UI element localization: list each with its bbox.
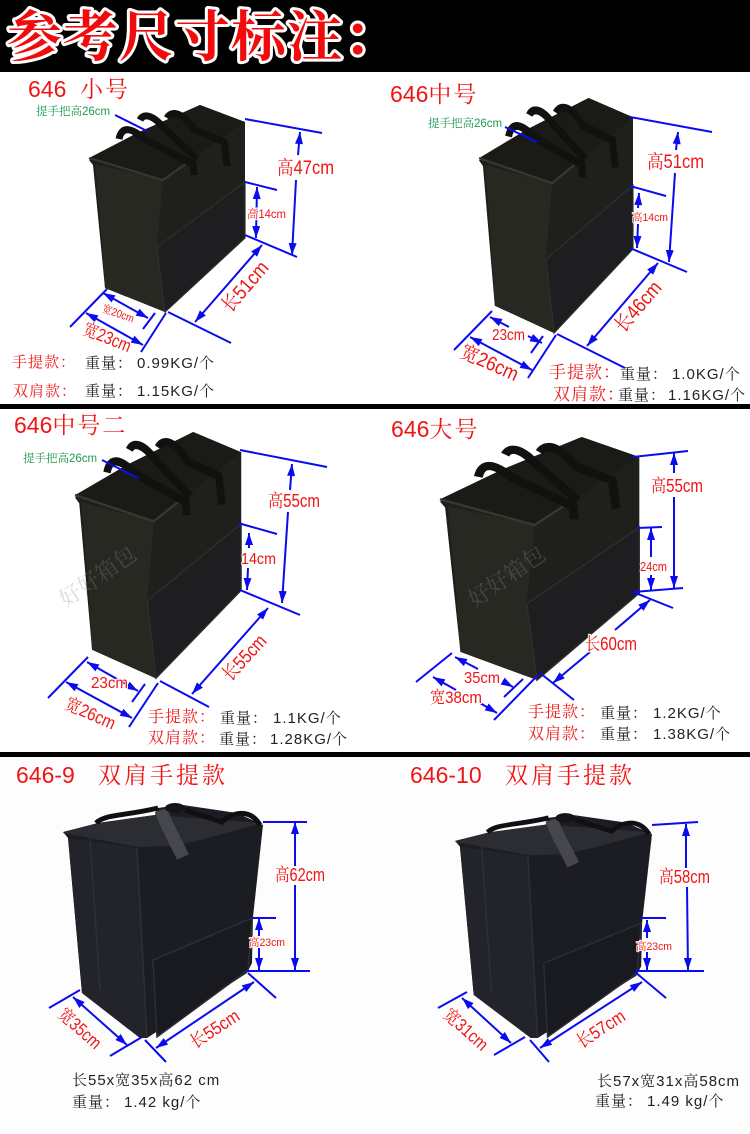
- weight: shoulder: 双肩款：: [148, 729, 216, 747]
- spec: dimensions: 长55x宽35x高62 cm: [72, 1071, 220, 1089]
- label: length 46: 长46cm: [610, 277, 666, 337]
- label: pocket height 23: 高23cm: [249, 935, 285, 949]
- heading: 646 small: 646: [28, 76, 66, 102]
- label: length 55: 长55cm: [186, 1006, 243, 1052]
- label: pocket height 23: 高23cm: [636, 939, 672, 953]
- label: inner width 35: 35cm: [464, 670, 500, 687]
- heading: 646 medium: 646中号: [390, 81, 478, 107]
- label: width 23: 宽23cm: [80, 319, 134, 356]
- label: height 58: 高58cm: [659, 867, 710, 887]
- spec: weight: 重量：: [72, 1094, 120, 1111]
- heading: 646-9: 双肩手提款: [98, 762, 228, 788]
- label: height 55: 高55cm: [268, 491, 320, 511]
- label: length 57: 长57cm: [573, 1006, 629, 1052]
- spec: weight: 1.42 kg/个: [124, 1094, 201, 1111]
- weight value: handbag: 1.1KG/个: [273, 710, 342, 727]
- heading: 646-10: 646-10: [410, 762, 482, 788]
- heading: 646-9: 646-9: [16, 762, 75, 788]
- weight value: shoulder: 重量：: [85, 383, 133, 400]
- divider bar: lower row: [0, 752, 750, 757]
- label: height 51: 高51cm: [647, 151, 704, 173]
- weight: handbag: 手提款：: [549, 363, 621, 382]
- weight value: shoulder: 1.28KG/个: [270, 731, 348, 748]
- photo: bag 646-10: [455, 813, 652, 1038]
- panel: 646 large: [391, 416, 731, 743]
- dimension lines: [454, 117, 712, 378]
- photo: bag 646-9: [63, 803, 263, 1038]
- label: height 55: 高55cm: [651, 476, 703, 496]
- spec: weight: 重量：: [595, 1093, 643, 1110]
- label: length 55: 长55cm: [218, 630, 271, 686]
- photo: bag medium: [479, 98, 633, 333]
- dimension lines: [70, 115, 322, 352]
- label: pocket height 24: 24cm: [640, 559, 667, 574]
- weight: shoulder: 双肩款：: [553, 385, 625, 404]
- title banner: [0, 0, 750, 72]
- label: width 20: 宽20cm: [100, 302, 136, 325]
- label: handle height: 提手把高26cm: [36, 104, 110, 118]
- label: width 26: 宽26cm: [62, 694, 119, 733]
- label: width 35: 宽35cm: [54, 1004, 106, 1053]
- label: inner width 23: 23cm: [492, 327, 525, 344]
- panel: 646-10: [410, 762, 740, 1110]
- label: pocket height 14: 14cm: [241, 551, 276, 568]
- weight: handbag: 手提款：: [12, 353, 76, 371]
- watermark: 好好箱包: [464, 541, 550, 612]
- weight value: shoulder: 重量：: [600, 726, 648, 743]
- label: width 38: 宽38cm: [430, 688, 482, 707]
- weight value: shoulder: 1.15KG/个: [137, 383, 215, 400]
- label: width 26: 宽26cm: [457, 340, 522, 386]
- label: height 47: 高47cm: [277, 157, 334, 179]
- weight: handbag: 手提款：: [148, 707, 216, 726]
- label: length 51: 长51cm: [217, 257, 273, 317]
- dimension lines: [49, 822, 310, 1062]
- weight value: handbag: 重量：: [220, 710, 268, 727]
- heading: 646 large: 646大号: [391, 416, 479, 442]
- weight value: shoulder: 1.38KG/个: [653, 726, 731, 743]
- spec: weight: 1.49 kg/个: [647, 1093, 724, 1110]
- weight value: handbag: 1.0KG/个: [672, 366, 741, 383]
- dimension lines: [438, 822, 704, 1062]
- label: handle height: 提手把高26cm: [23, 451, 97, 465]
- photo: bag small: [89, 105, 245, 312]
- divider bar: upper row: [0, 404, 750, 409]
- panel: 646 medium two: [14, 412, 348, 748]
- panel: 646 small: [12, 76, 334, 400]
- photo: bag large: [440, 437, 639, 680]
- weight value: handbag: 1.2KG/个: [653, 705, 722, 722]
- label: pocket height 14: 高14cm: [247, 206, 286, 221]
- weight value: handbag: 重量：: [85, 355, 133, 372]
- photo: bag medium two: [75, 432, 241, 678]
- dimension lines: [48, 450, 327, 727]
- weight value: handbag: 重量：: [620, 366, 668, 383]
- spec: dimensions: 长57x宽31x高58cm: [597, 1072, 740, 1090]
- label: inner width 23: 23cm: [91, 675, 128, 692]
- weight value: shoulder: 1.16KG/个: [668, 387, 746, 404]
- weight value: shoulder: 重量：: [219, 731, 267, 748]
- weight value: handbag: 0.99KG/个: [137, 355, 215, 372]
- label: handle height: 提手把高26cm: [428, 116, 502, 130]
- panel: 646 medium: [390, 81, 746, 404]
- weight: handbag: 手提款：: [528, 702, 596, 721]
- bottom section background: [0, 756, 750, 1134]
- watermark: 好好箱包: [55, 541, 141, 612]
- weight value: handbag: 重量：: [600, 705, 648, 722]
- heading: 646-10: 双肩手提款: [505, 762, 635, 788]
- dimension lines: [416, 451, 688, 720]
- label: height 62: 高62cm: [275, 865, 325, 885]
- weight value: shoulder: 重量：: [618, 387, 666, 404]
- heading: 646 medium two: 646中号二: [14, 412, 127, 438]
- label: width 31: 宽31cm: [440, 1004, 492, 1055]
- label: length 60: 长60cm: [585, 634, 637, 654]
- weight: shoulder: 双肩款：: [528, 725, 596, 743]
- panel: 646-9: [16, 762, 325, 1111]
- heading: 646 small: 小号: [80, 76, 130, 102]
- label: pocket height 14: 高14cm: [632, 210, 668, 224]
- weight: shoulder: 双肩款：: [13, 383, 77, 400]
